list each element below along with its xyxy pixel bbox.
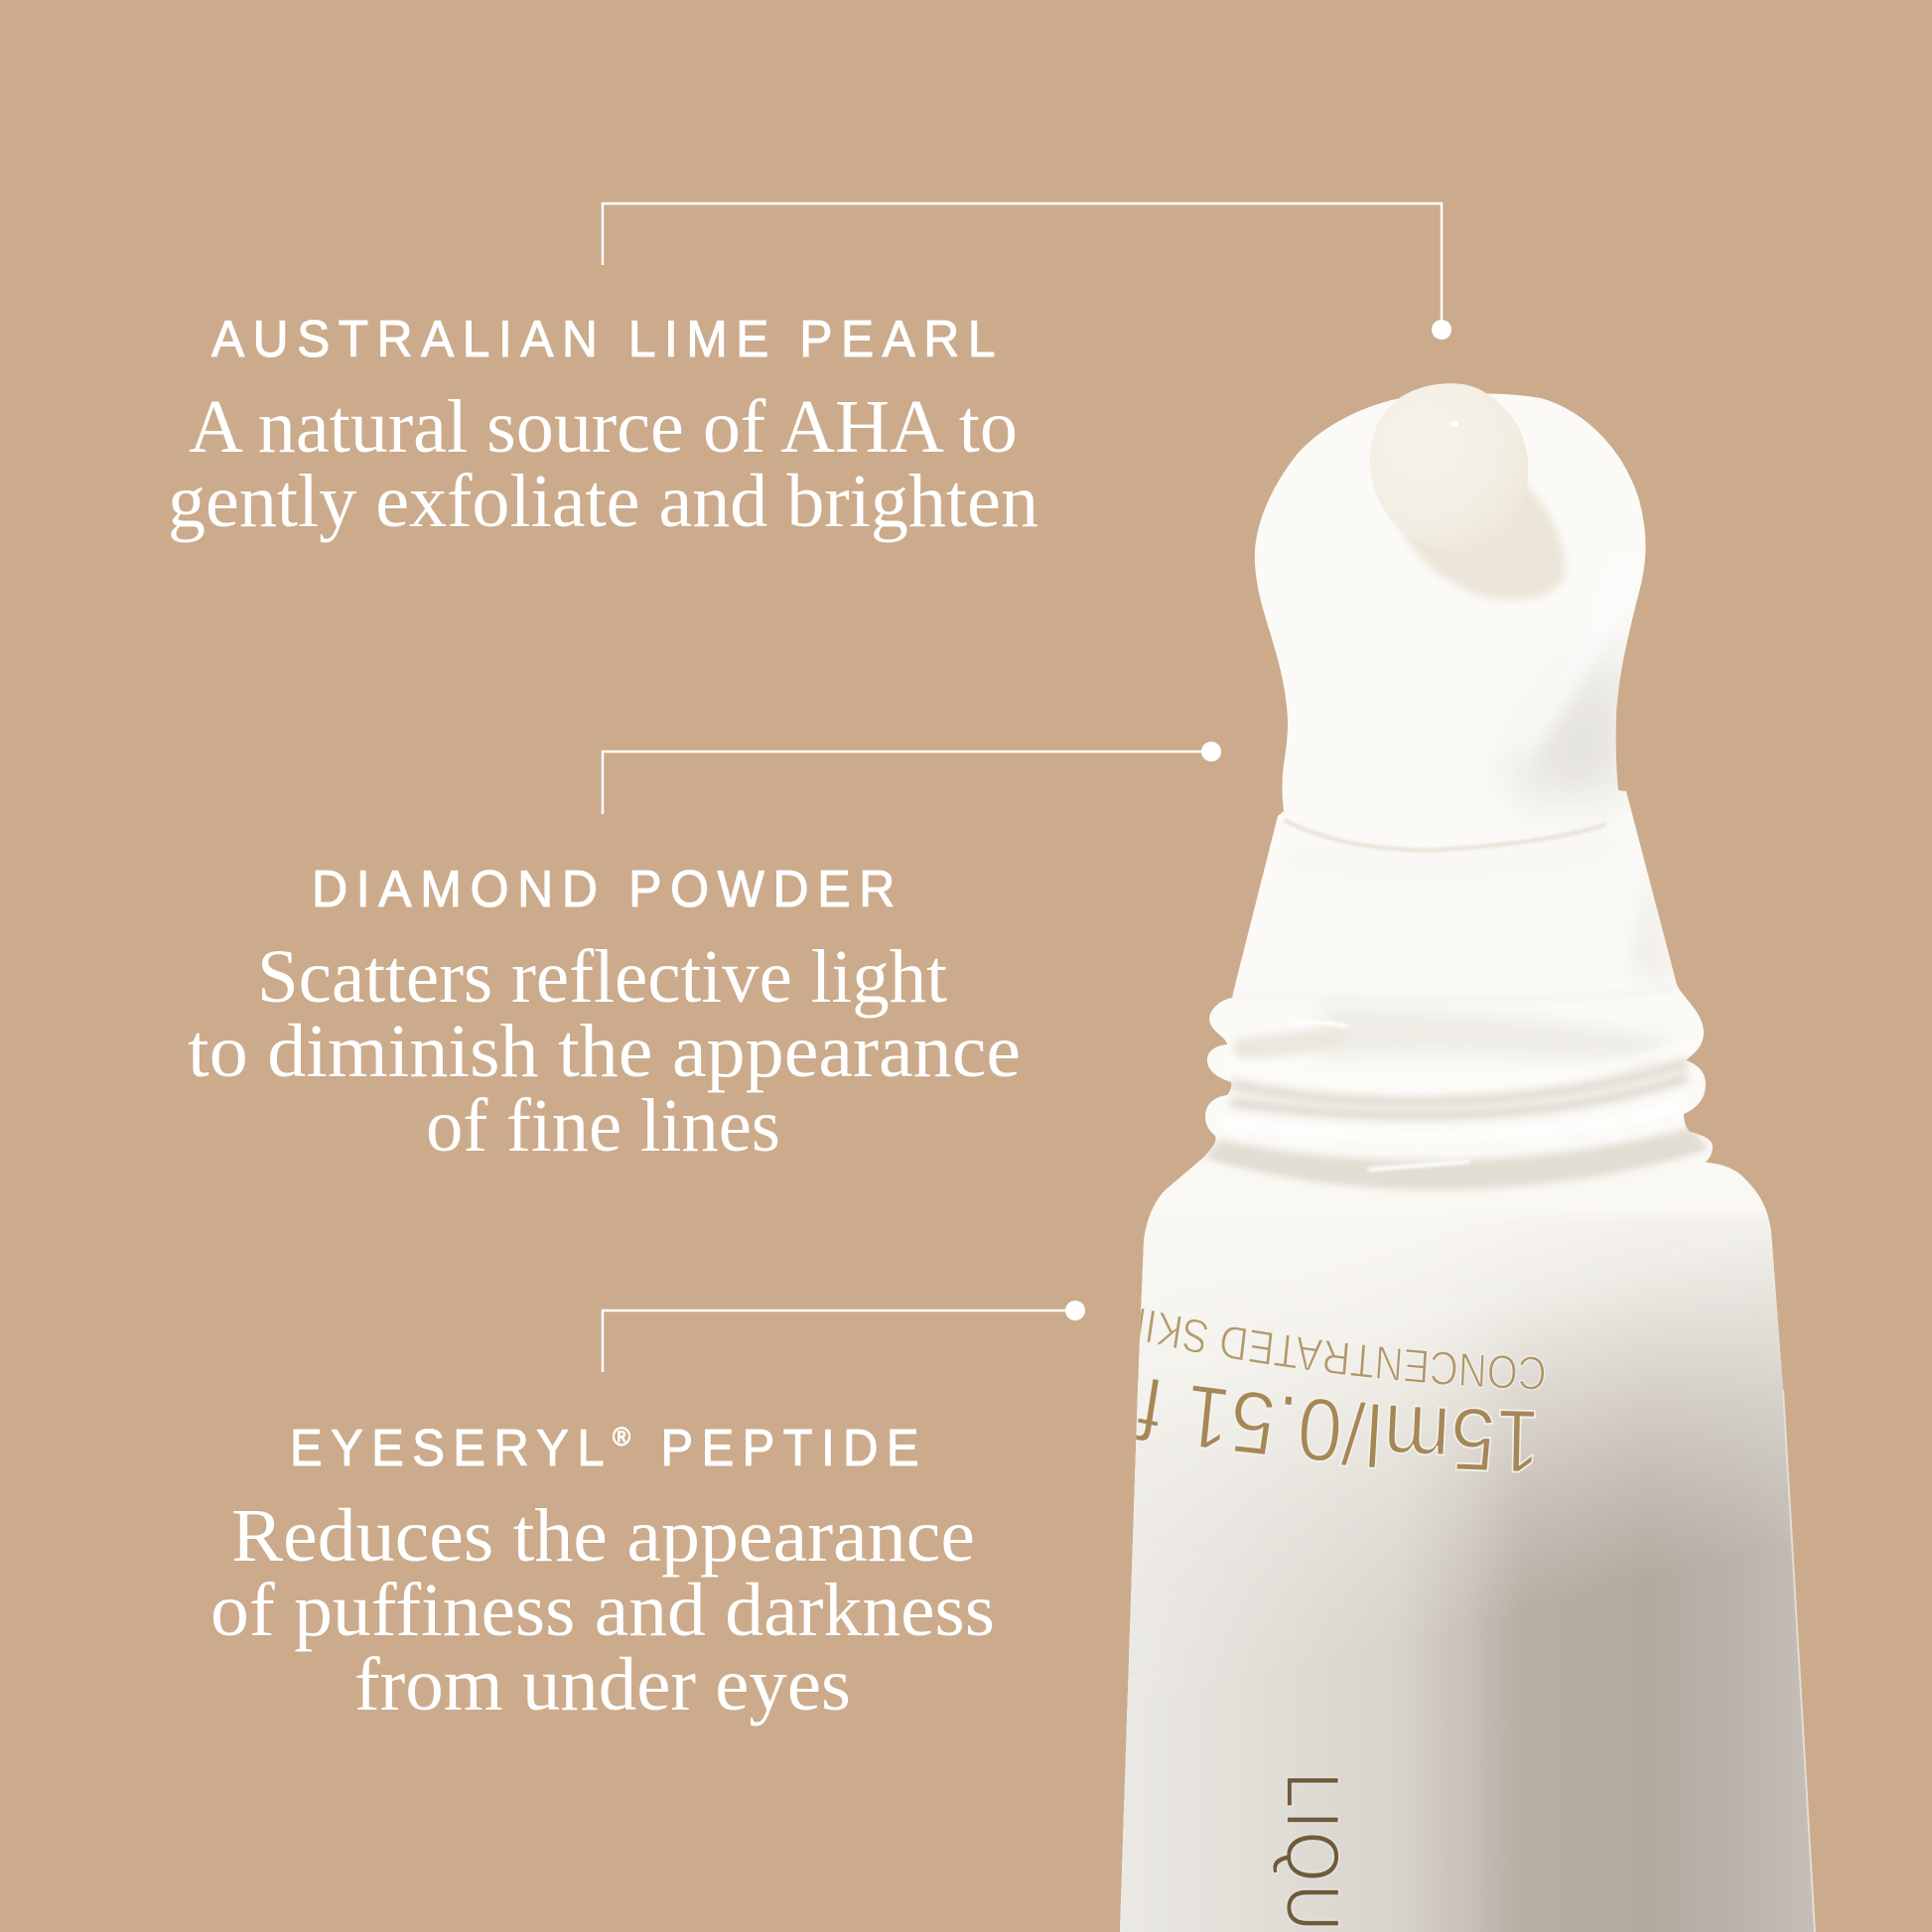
- heading: EYESERYL: [290, 1420, 633, 1477]
- body right edge highlight: [1783, 1390, 1815, 1932]
- description: of puffiness and darkness: [210, 1569, 995, 1652]
- product: white tube with cream drop: [1120, 383, 1816, 1932]
- text block: Diamond Powder: [188, 861, 1021, 1168]
- description: to diminish the appearance: [188, 1010, 1021, 1093]
- description: Scatters reflective light: [257, 935, 947, 1019]
- heading: AUSTRALIAN LIME PEARL: [211, 311, 1004, 368]
- tube silhouette: [1120, 393, 1815, 1932]
- heading: PEPTIDE: [638, 1420, 927, 1477]
- heading: ®: [613, 1422, 638, 1451]
- description: A natural source of AHA to: [189, 385, 1018, 469]
- connector dot: [1201, 742, 1221, 761]
- tube shading: [1092, 556, 1847, 1932]
- connector dot: [1065, 1301, 1085, 1320]
- text block: Australian Lime Pearl: [168, 311, 1038, 543]
- tube label: product name: LIQU: [1270, 1772, 1354, 1932]
- description: Reduces the appearance: [231, 1494, 975, 1578]
- connector: Eyeseryl Peptide: [603, 1301, 1085, 1372]
- drop highlight: [1450, 421, 1458, 427]
- description: from under eyes: [354, 1643, 851, 1726]
- tube label: volume: 15ml/0.51 fl.oz: [1136, 1376, 1536, 1473]
- cream drop: [1370, 383, 1528, 552]
- description: of fine lines: [426, 1084, 780, 1168]
- shadow under cream drop: [1395, 459, 1565, 601]
- connector dot: [1432, 320, 1451, 340]
- connector: Diamond Powder: [603, 742, 1221, 814]
- connector: Australian Lime Pearl: [603, 204, 1451, 340]
- tube label: CONCENTRATED SKINCARE: CONCENTRATED SKINCARE: [1140, 1308, 1545, 1390]
- description: [210, 1494, 995, 1726]
- text block: Eyeseryl Peptide: [210, 1420, 995, 1726]
- description: gently exfoliate and brighten: [168, 460, 1038, 543]
- heading: DIAMOND POWDER: [312, 861, 903, 918]
- description: [168, 385, 1038, 543]
- description: [188, 935, 1021, 1168]
